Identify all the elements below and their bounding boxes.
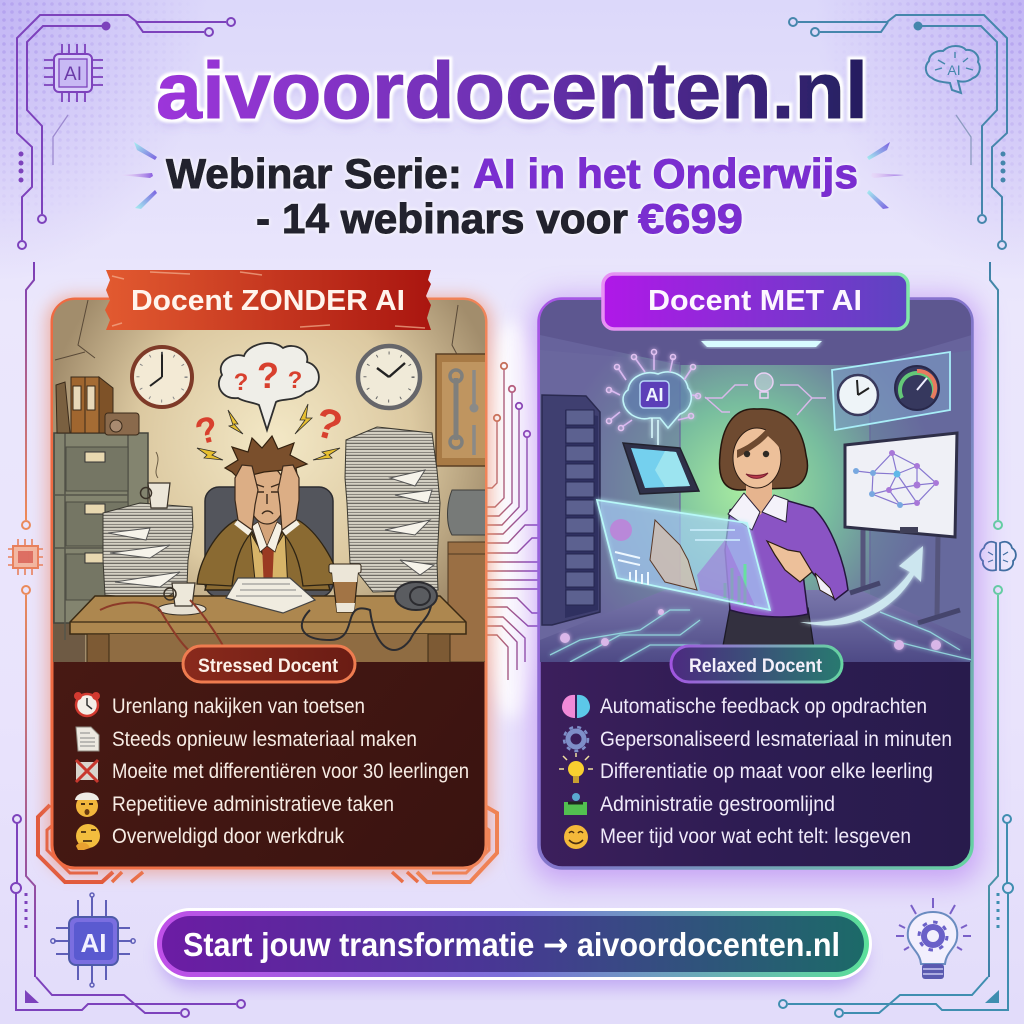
paper stack left [103, 503, 193, 600]
call to action button [154, 908, 872, 988]
blouse [725, 497, 848, 617]
icon: alarm clock [74, 692, 100, 716]
jacket [205, 528, 330, 590]
circuit: top left [17, 15, 235, 249]
icon: crossed book [76, 760, 98, 782]
hologram screen [597, 500, 770, 610]
floor circuit lines [550, 609, 972, 662]
mug on stack [140, 452, 170, 508]
sparks: left of subtitle [120, 142, 157, 209]
thought cloud: ? [257, 355, 279, 396]
icon: AI chip top left [44, 44, 103, 102]
circuit: top right [789, 15, 1007, 249]
thought cloud [219, 343, 319, 430]
neck and collar [746, 482, 772, 515]
icon: small chip left [8, 539, 43, 575]
icon: AI brain top right [926, 46, 980, 93]
text: Moeite met differentieren: Moeite met differentiëren voor 30 leerlingen [112, 760, 469, 783]
text: Automatische feedback op opdrachten: Automatische feedback op opdrachten [600, 695, 927, 718]
right side furniture [436, 354, 486, 662]
binders [56, 377, 139, 435]
text: Differentiatie op maat voor elke leerling: Differentiatie op maat voor elke leerling [600, 760, 933, 783]
panel glow right [532, 296, 980, 882]
whiteboard [845, 433, 960, 623]
text: Administratie gestroomlijnd: Administratie gestroomlijnd [600, 793, 835, 816]
band: Docent MET AI: Docent MET AI [648, 285, 862, 317]
icon: streamlined administration [564, 793, 587, 815]
tablet [623, 443, 699, 494]
icon: AI chip bottom [51, 893, 135, 987]
pill: Stressed Docent [183, 646, 355, 682]
woman figure [720, 409, 848, 662]
coffee mug and saucer [158, 583, 206, 615]
hair back [720, 409, 807, 490]
band: Docent MET AI [603, 274, 908, 329]
pill: Relaxed Docent [671, 646, 842, 682]
coffee to go [329, 564, 361, 612]
title: aivoordocenten.nl [156, 46, 868, 135]
AI brain hologram [606, 350, 700, 445]
stress marks: ? [191, 407, 223, 453]
tangled cables [100, 581, 438, 651]
icon: AI chip bottom: AI [80, 928, 106, 958]
band: Docent ZONDER AI: Docent ZONDER AI [131, 285, 405, 317]
circuit: right side [989, 262, 1002, 977]
icon: exploding head [75, 792, 99, 817]
subtitle line 2: - 14 webinars voor [256, 195, 628, 242]
icon: AI brain top right: AI [947, 62, 961, 78]
paper stack right [345, 427, 440, 592]
panel base right [539, 299, 972, 868]
thought cloud: ? [288, 367, 302, 394]
desk [70, 596, 466, 664]
text: Steeds opnieuw lesmateriaal maken: Steeds opnieuw lesmateriaal maken [112, 728, 417, 751]
growth arrow [800, 546, 923, 625]
icon: AI chip top left: AI [64, 64, 82, 85]
text: Repetitieve administratieve taken: Repetitieve administratieve taken [112, 793, 394, 816]
panel: Docent ZONDER AI [52, 270, 486, 868]
left arm [197, 520, 251, 586]
face [254, 471, 281, 525]
icon: gear [564, 727, 588, 751]
circuit: centre connecting traces [487, 363, 538, 680]
text: Urenlang nakijken van toetsen: Urenlang nakijken van toetsen [112, 695, 365, 718]
icon: document [76, 727, 99, 751]
circuit: left side [22, 262, 35, 977]
text: Meer tijd voor wat echt telt: Meer tijd voor wat echt telt: lesgeven [600, 825, 911, 848]
text: Gepersonaliseerd lesmateriaal in minuten: Gepersonaliseerd lesmateriaal in minuten [600, 728, 952, 751]
hair [225, 436, 307, 480]
pointing hand [767, 541, 812, 582]
page background [0, 0, 1024, 722]
icon: light bulb [559, 753, 593, 783]
AI label in hologram: AI [646, 385, 664, 405]
stress marks [196, 404, 341, 460]
thought cloud: ? [234, 369, 248, 396]
dashboard panel [832, 352, 950, 430]
right arm [283, 520, 340, 586]
text: Overweldigd door werkdruk: Overweldigd door werkdruk [112, 825, 344, 848]
stress marks: ? [310, 398, 347, 450]
icon: thinking face [76, 824, 100, 850]
skirt [720, 608, 816, 662]
panel glow left [46, 296, 492, 874]
icon: lightbulb with gear [896, 898, 971, 979]
icon: small brain right [980, 542, 1016, 570]
floor [540, 590, 972, 662]
call to action button: Start jouw transformatie → aivoordocenten.nl [183, 925, 840, 964]
face [733, 428, 781, 488]
clock left [132, 347, 192, 407]
neck and collar [258, 520, 277, 545]
panel: Docent MET AI [539, 274, 972, 868]
floor under desk [53, 590, 85, 662]
subtitle line 1: AI in het Onderwijs [473, 150, 858, 197]
decoration: angular frame behind left panel [38, 805, 497, 882]
bulb hologram [705, 373, 826, 415]
ceiling light [701, 341, 822, 347]
filing cabinet [54, 433, 148, 640]
subtitle line 1: Webinar Serie: [166, 150, 462, 197]
chair [205, 487, 333, 597]
server rack [542, 395, 600, 625]
desk papers [226, 578, 315, 613]
sparks: right of subtitle [867, 142, 904, 209]
pill: Relaxed Docent: Relaxed Docent [689, 656, 823, 677]
icon: smiling face [564, 825, 588, 849]
clock right [358, 346, 420, 408]
teacher figure [197, 436, 340, 590]
circuit: bottom right [779, 815, 1013, 1017]
band: Docent ZONDER AI [105, 270, 431, 330]
illustration: relaxed teacher [540, 300, 972, 662]
subtitle line 2: €699 [638, 195, 743, 242]
pill: Stressed Docent: Stressed Docent [198, 656, 339, 677]
circuit: bottom left [11, 815, 245, 1017]
AI label in hologram [640, 381, 669, 408]
illustration: stressed teacher [53, 300, 486, 664]
icon: brain bicolour [562, 695, 590, 718]
panel base left [52, 299, 486, 868]
subtitle line 1 [166, 150, 858, 197]
